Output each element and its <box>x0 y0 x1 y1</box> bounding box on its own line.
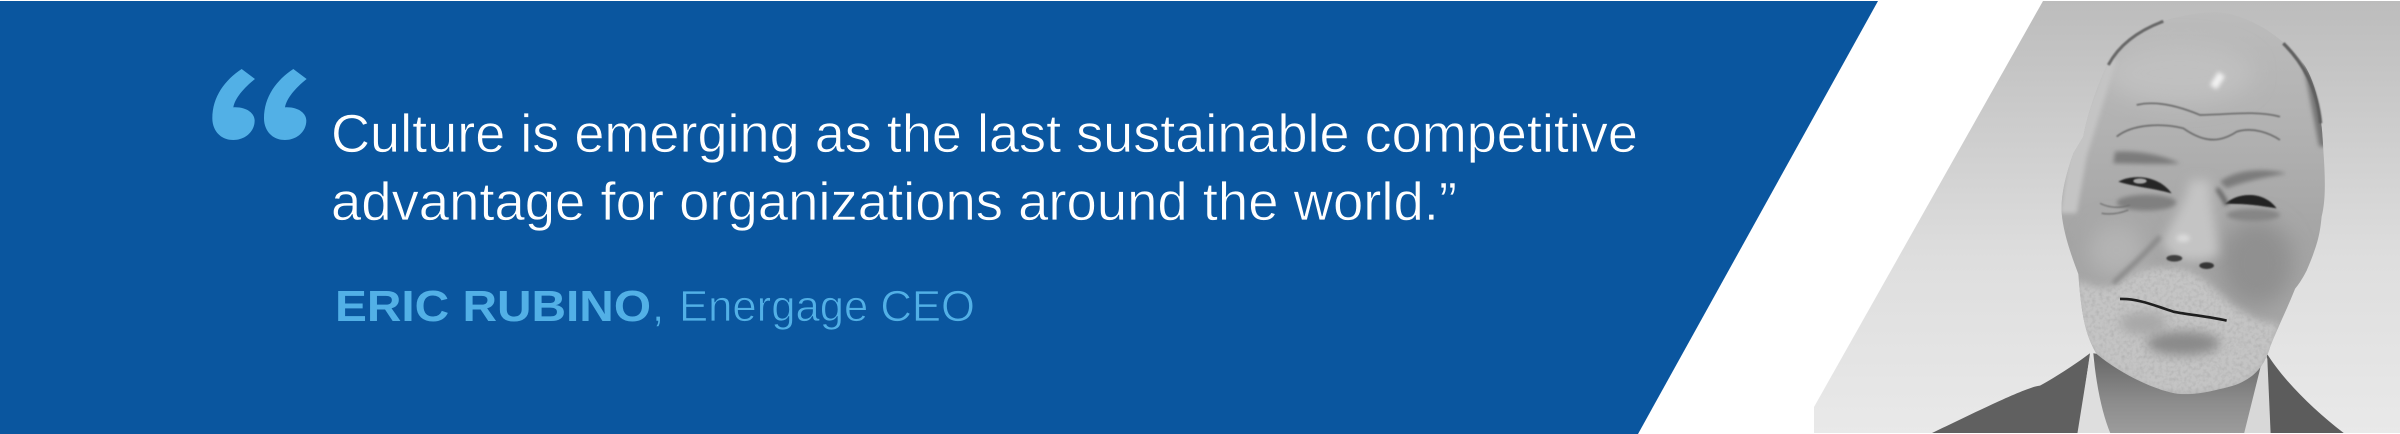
jacket <box>1930 353 2345 434</box>
attribution <box>335 282 975 331</box>
nose <box>2163 180 2218 269</box>
attribution: ERIC RUBINO <box>335 282 651 331</box>
photo: portrait of Eric Rubino <box>1800 0 2400 434</box>
right cheek shadow <box>2220 220 2293 307</box>
forehead wrinkles <box>2117 103 2280 140</box>
beard dark centre <box>2147 331 2220 355</box>
attribution: Energage CEO <box>679 282 975 331</box>
right edge shadow <box>2303 63 2327 147</box>
forehead highlight <box>2210 72 2225 89</box>
icon: opening quotation mark <box>212 69 307 140</box>
photo background <box>1800 0 2400 434</box>
icon: left eye <box>2117 177 2177 211</box>
eyebrows <box>2113 151 2287 188</box>
shirt collar <box>2077 355 2271 434</box>
quote text: advantage for organizations around the world.” <box>331 172 1457 232</box>
hairline right <box>2283 43 2321 123</box>
panel: blue quote background <box>0 1 1878 434</box>
nasolabial fold <box>2113 237 2160 283</box>
forehead light <box>2122 60 2238 98</box>
beard <box>2075 267 2280 395</box>
quote text: Culture is emerging as the last sustainable competitive <box>331 104 1638 164</box>
left cheek light <box>2091 227 2142 274</box>
icon: right eye <box>2217 188 2280 221</box>
quote text <box>331 104 1638 232</box>
under-lip patch <box>2120 312 2167 335</box>
neck <box>2093 353 2264 434</box>
head <box>2062 36 2325 394</box>
crow's feet <box>2100 203 2130 214</box>
attribution: , <box>652 282 664 331</box>
portrait figure <box>1930 7 2345 434</box>
hairline left <box>2108 21 2163 65</box>
mouth <box>2120 299 2227 321</box>
left temple mottling <box>2062 66 2112 214</box>
